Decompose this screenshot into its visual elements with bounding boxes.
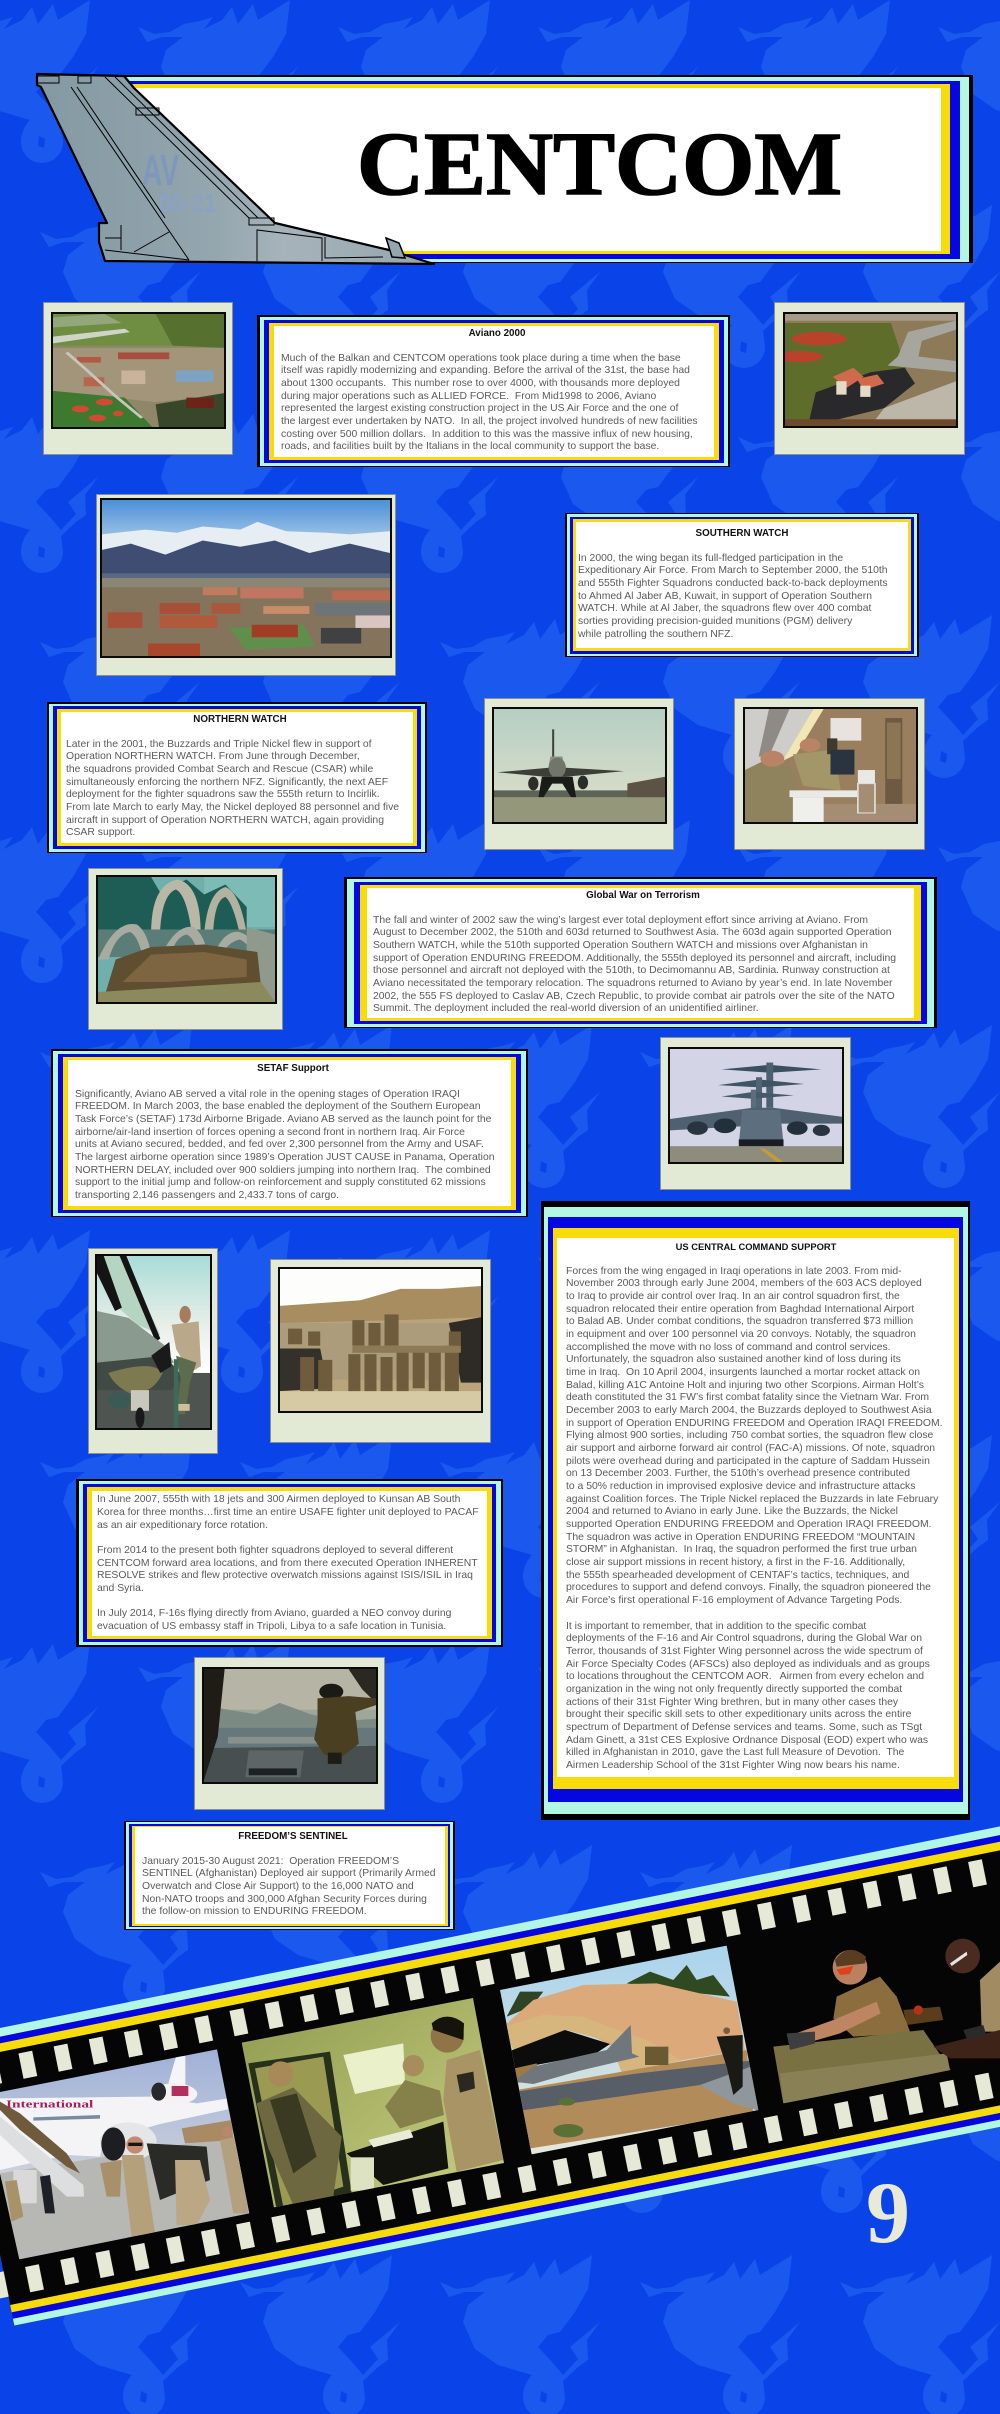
text: Aviano body: Much of the Balkan and CENTCOM operations took place during a time when the base itself was rapidly modernizing and expanding. Before the arrival of the 31st, the base had about 1300 occupants. This number rose to over 4000, with thousands more deployed during major operations such as ALLIED FORCE. From Mid1998 to 2006, Aviano represented the largest existing construction project in the US Air Force and the one of the largest ever undertaken by NATO. In all, the project involved hundreds of new facilities costing over 500 million dollars. In addition to this was the massive influx of new housing, roads, and facilities built by the Italians in the local community to support the base.	[281, 353, 698, 452]
heading: Global War on Terrorism: Global War on Terrorism	[586, 890, 700, 901]
heading: Southern Watch: SOUTHERN WATCH	[696, 528, 788, 539]
icon: F-16 tail fin: 00-21	[159, 188, 216, 218]
photo card: soldier on helicopter ramp over Kabul	[194, 1657, 385, 1810]
photo card: airmen in ops tent	[734, 698, 925, 850]
photo card: F-16 on runway	[484, 698, 674, 850]
text: Northern Watch body: Later in the 2001, the Buzzards and Triple Nickel flew in support of Operation NORTHERN WATCH. From June through December, the squadrons provided Combat Search and Rescue (CSAR) while simultaneously enforcing the northern NFZ. Significantly, the next AEF deployment for the fighter squadrons saw the 555th return to Incirlik. From late March to early May, the Nickel deployed 88 personnel and five aircraft in support of Operation NORTHERN WATCH, again providing CSAR support.	[66, 739, 399, 838]
panel: Southern Watch	[565, 513, 919, 657]
panel: Kunsan, CENTCOM and Libya notes	[76, 1479, 503, 1647]
photo card: C-17 aircraft	[660, 1037, 851, 1190]
photo card: Kandahar group	[88, 868, 283, 1030]
photo card: base entry gate	[774, 302, 965, 455]
photo: troops boarding airliner: International	[6, 2099, 94, 2110]
text: SETAF body: Significantly, Aviano AB served a vital role in the opening stages of Operation IRAQI FREEDOM. In March 2003, the base enabled the deployment of the Southern European Task Force’s (SETAF) 173d Airborne Brigade. Aviano AB served as the launch point for the airborne/air-land insertion of forces opening a second front in northern Iraq. Air Force units at Aviano secured, bedded, and fed over 2,300 personnel from the Army and USAF. The largest airborne operation since 1989’s Operation JUST CAUSE in Panama, Operation NORTHERN DELAY, included over 900 soldiers jumping into northern Iraq. The combined support to the initial jump and follow-on reinforcement and supply constituted 62 missions transporting 2,146 passengers and 2,433.7 tons of cargo.	[75, 1089, 495, 1201]
icon: F-16 tail fin: AV	[142, 146, 179, 195]
text: US Central Command body: Forces from the wing engaged in Iraqi operations in late 2003. From mid- November 2003 through early June 2004, members of the 603 ACS deployed to Iraq to provide air control over Iraq. In an air control squadron first, the squadron relocated their entire operation from Baghdad International Airport to Balad AB. Under combat conditions, the squadron transferred $73 million in equipment and over 100 personnel via 20 convoys. Notably, the squadron accomplished the move with no loss of command and control services. Unfortunately, the squadron also sustained another kind of loss during its time in Iraq. On 10 April 2004, insurgents launched a mortar rocket attack on Balad, killing A1C Antoine Holt and injuring two other Scorpions. Airman Holt’s death constituted the 31 FW’s first combat fatality since the Vietnam War. From December 2003 to early March 2004, the Buzzards deployed to Southwest Asia in support of Operation ENDURING FREEDOM and Operation IRAQI FREEDOM. Flying almost 900 sorties, including 750 combat sorties, the squadron flew close air support and airborne forward air control (FAC-A) missions. Of note, squadron pilots were overhead during and participated in the capture of Saddam Hussein on 13 December 2003. Further, the 510th’s overhead presence contributed to a 50% reduction in improvised explosive device and infrastructure attacks against Coalition forces. The Triple Nickel replaced the Buzzards in late February 2004 and returned to Aviano in early June. Like the Buzzards, the Nickel supported Operation ENDURING FREEDOM and Operation IRAQI FREEDOM. The squadron was active in Operation ENDURING FREEDOM “MOUNTAIN STORM” in Afghanistan. In Iraq, the squadron performed the first true urban close air support missions in recent history, a first in the F-16. Additionally, the 555th spearheaded development of CENTAF’s tactics, techniques, and procedures to support and defend convoys. Finally, the squadron pioneered the Air Force’s first operational F-16 employment of Advance Targeting Pods. It is important to remember, that in addition to the specific combat deployments of the F-16 and Air Control squadrons, during the Global War on Terror, thousands of 31st Fighter Wing personnel across the wide spectrum of Air Force Specialty Codes (AFSCs) also deployed as individuals and as groups to locations throughout the CENTCOM AOR. Airmen from every echelon and organization in the wing not only frequently directly supported the combat actions of their 31st Fighter Wing brethren, but in many other cases they brought their specific skill sets to other expeditionary units across the entire spectrum of Department of Defense services and teams. Some, such as TSgt Adam Ginett, a 31st CES Explosive Ordnance Disposal (EOD) expert who was killed in Afghanistan in 2010, gave the Last full Measure of Devotion. The Airmen Leadership School of the 31st Fighter Wing now bears his name.	[566, 1266, 942, 1771]
panel: SETAF Support	[51, 1049, 528, 1217]
title: CENTCOM: CENTCOM	[357, 115, 842, 214]
panel: US Central Command Support	[541, 1201, 970, 1820]
header banner frame	[120, 75, 973, 263]
heading: Freedom's Sentinel: FREEDOM’S SENTINEL	[238, 1831, 348, 1842]
text: Kunsan body: In June 2007, 555th with 18 jets and 300 Airmen deployed to Kunsan AB South Korea for three months…first time an entire USAFE fighter unit deployed to PACAF as an air expeditionary force rotation. From 2014 to the present both fighter squadrons deployed to several different CENTCOM forward area locations, and from there executed Operation INHERENT RESOLVE strikes and flew protective overwatch missions against ISIS/ISIL in Iraq and Syria. In July 2014, F-16s flying directly from Aviano, guarded a NEO convoy during evacuation of US embassy staff in Tripoli, Libya to a safe location in Tunisia.	[97, 1494, 479, 1632]
text: GWOT body: The fall and winter of 2002 saw the wing’s largest ever total deployment effort since arriving at Aviano. From August to December 2002, the 510th and 603d returned to Southwest Asia. The 603d again supported Operation Southern WATCH, while the 510th supported Operation Southern WATCH and missions over Afghanistan in support of Operation ENDURING FREEDOM. Additionally, the 555th deployed its personnel and aircraft, including those personnel and aircraft not deployed with the 510th, to Decimomannu AB, Sardinia. Runway construction at Aviano necessitated the temporary relocation. The squadrons returned to Aviano by year’s end. In late November 2002, the 555 FS deployed to Caslav AB, Czech Republic, to provide combat air patrols over the site of the NATO Summit. The deployment included the real-world diversion of an unidentified airliner.	[373, 915, 896, 1014]
icon: F-16 tail fin	[37, 74, 434, 264]
panel: Aviano 2000	[257, 315, 730, 467]
photo: three airmen in office	[233, 1993, 507, 2213]
heading: Northern Watch: NORTHERN WATCH	[193, 714, 287, 725]
photo: F-16 outside hardened shelter	[497, 1943, 763, 2160]
text: Southern Watch body: In 2000, the wing began its full-fledged participation in the Expeditionary Air Force. From March to September 2000, the 510th and 555th Fighter Squadrons conducted back-to-back deployments to Ahmed Al Jaber AB, Kuwait, in support of Operation Southern WATCH. While at Al Jaber, the squadrons flew over 400 combat sorties providing precision-guided munitions (PGM) delivery while patrolling the southern NFZ.	[578, 553, 888, 640]
photo: troops boarding airliner	[0, 2047, 253, 2263]
photo card: pilot climbing into F-16	[88, 1248, 218, 1454]
heading: Aviano 2000: Aviano 2000	[469, 328, 525, 339]
page number 9: 9	[866, 2165, 910, 2262]
panel: Global War on Terrorism	[344, 877, 937, 1028]
photo card: aerial view of base	[43, 302, 233, 455]
panel: Northern Watch	[47, 702, 427, 853]
photo: munitions crew working on bomb	[773, 1938, 1000, 2104]
film strip band	[0, 1815, 1000, 2330]
photo card: mountains over Aviano	[96, 494, 396, 676]
heading: SETAF Support: SETAF Support	[257, 1063, 329, 1074]
heading: US Central Command Support: US CENTRAL COMMAND SUPPORT	[676, 1241, 836, 1252]
film strip with four photos	[0, 1826, 1000, 2326]
photo card: squad with bulldozer	[270, 1259, 491, 1443]
panel: Freedom's Sentinel	[124, 1821, 455, 1930]
text: Freedom's Sentinel body: January 2015-30 August 2021: Operation FREEDOM’S SENTINEL (Afghanistan) Deployed air support (Primarily Armed Overwatch and Close Air Support) to the 16,000 NATO and Non-NATO troops and 300,000 Afghan Security Forces during the follow-on mission to ENDURING FREEDOM.	[142, 1856, 436, 1917]
